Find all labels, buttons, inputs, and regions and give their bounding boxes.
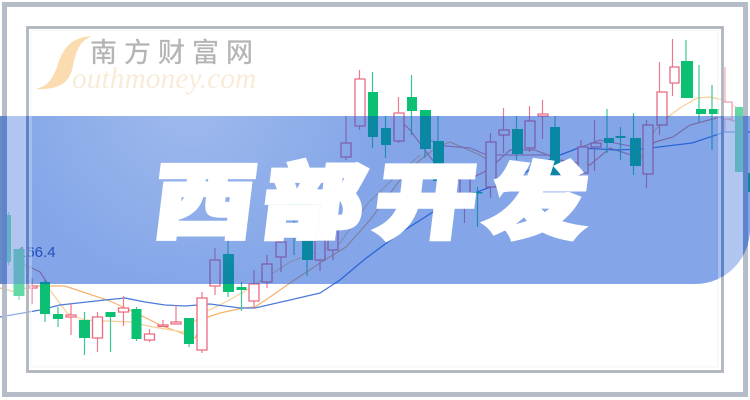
title: 开	[370, 158, 481, 249]
candlesticks	[6, 39, 750, 355]
translucent strip inside inner frame	[29, 29, 721, 370]
logo: southmoney watermark: 南方财富网	[90, 38, 260, 68]
band left edge shade	[0, 116, 2, 284]
moving average lines	[0, 97, 750, 338]
logo: southmoney watermark	[35, 36, 260, 95]
logo: southmoney watermark: outhmoney.com	[72, 63, 256, 95]
band highlight	[32, 116, 450, 284]
price label: 166.4	[18, 244, 56, 261]
title: 西	[149, 158, 260, 249]
frame: thin inner line	[31, 30, 718, 367]
frame: inner border	[28, 28, 722, 372]
title: 部	[258, 158, 370, 249]
title band	[0, 116, 750, 284]
title: 发	[481, 158, 592, 249]
